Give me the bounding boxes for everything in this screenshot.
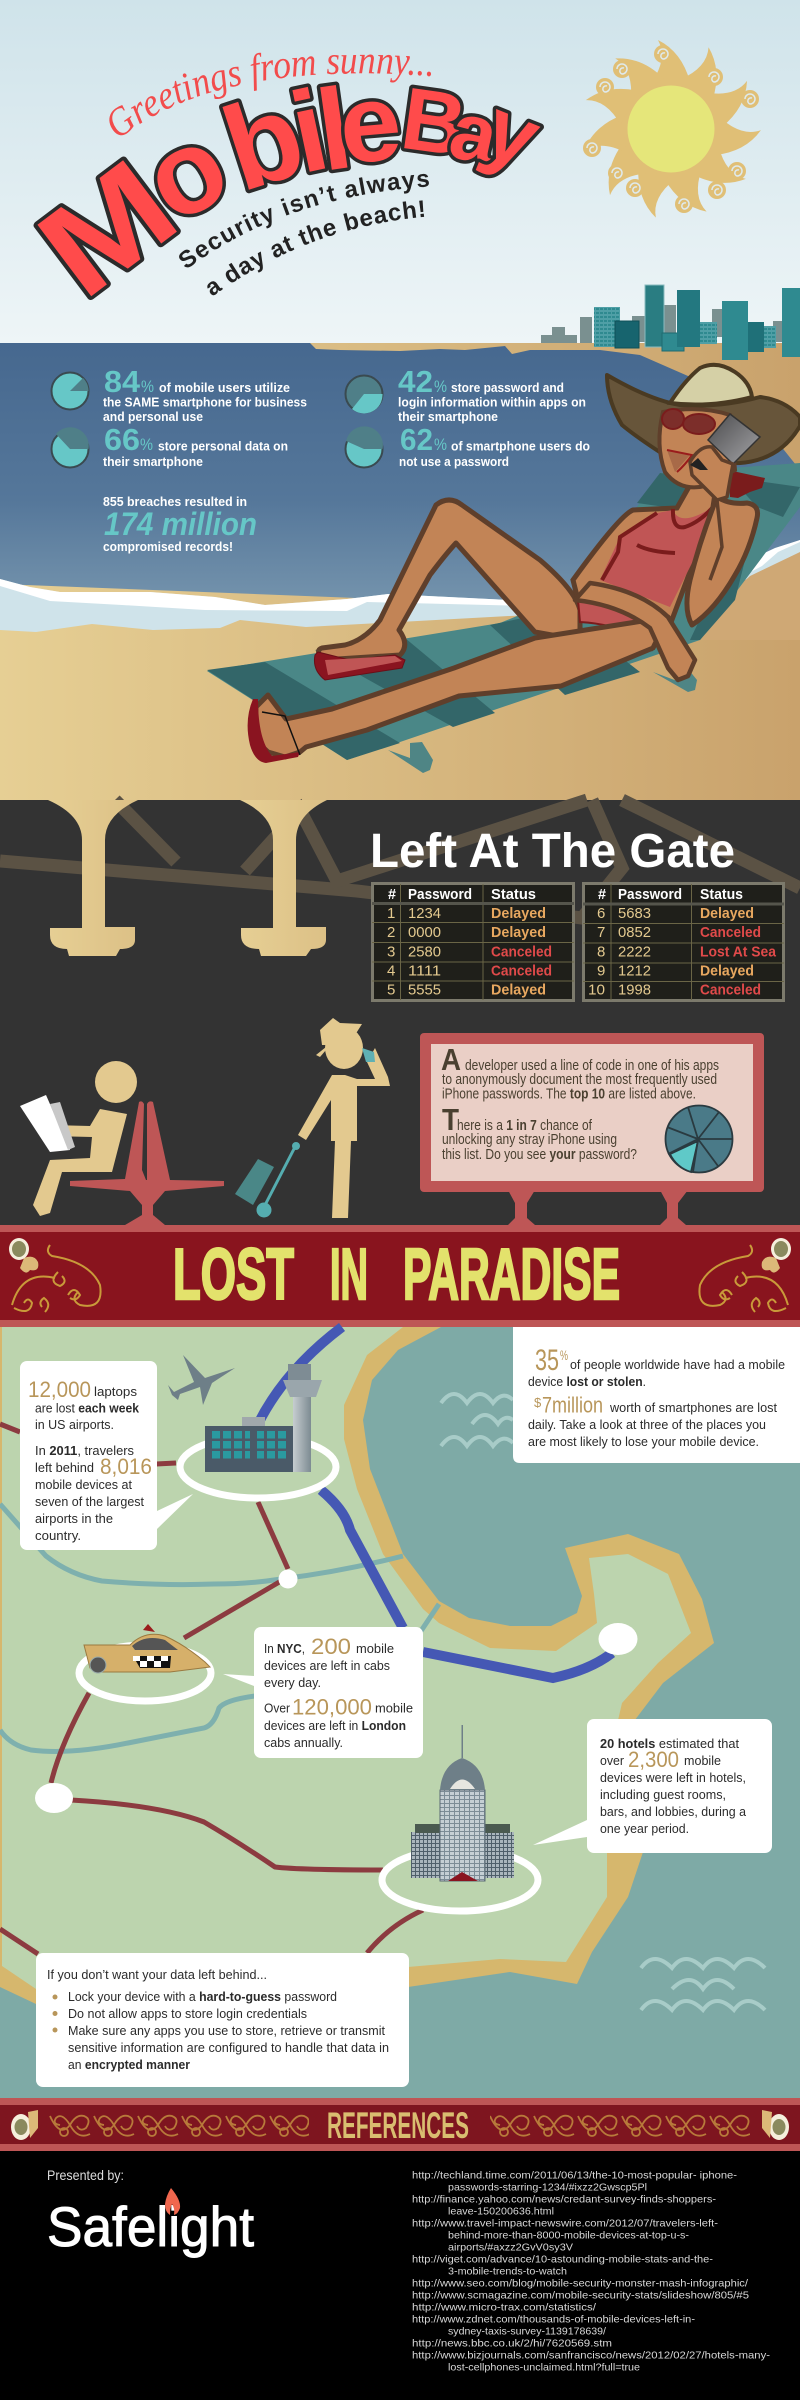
callout: taxi stats: devices are left in cabs	[264, 1658, 390, 1673]
references list: http://www.zdnet.com/thousands-of-mobile-devices-left-in-	[412, 2314, 696, 2326]
ornament left	[9, 1238, 101, 1312]
callout: airport stats: mobile devices at	[35, 1477, 132, 1492]
location: taxi	[79, 1624, 211, 1701]
table: passwords 6 to 10: 7	[597, 924, 605, 941]
ornament right	[699, 1238, 791, 1312]
table: passwords 1 to 5: 3	[387, 944, 395, 960]
stat: 62 percent: of smartphone users do	[451, 440, 590, 454]
pie: 66%	[52, 427, 89, 468]
stat: 66 percent: store personal data on	[158, 440, 288, 454]
table: passwords 1 to 5	[372, 884, 574, 1000]
callout: airport stats: in US airports.	[35, 1417, 114, 1432]
logo: presented by Safelight: Presented by:	[47, 2167, 124, 2183]
suitcase	[235, 1159, 274, 1205]
callout: airport stats: In 2011, travelers	[35, 1443, 134, 1458]
greeting script: Greetings from sunny...	[109, 52, 431, 136]
sea	[0, 343, 800, 625]
pie: 84%	[52, 372, 88, 410]
stat: 84 percent: of mobile users utilize	[159, 381, 290, 395]
references list: behind-more-than-8000-mobile-devices-at-top-u-s-	[448, 2230, 690, 2242]
table: passwords 1 to 5: 2580	[408, 944, 441, 960]
billboard: unlocking any stray iPhone using	[442, 1132, 617, 1148]
figure: seated reader	[20, 1061, 224, 1225]
heading: Mobile Bay: b	[208, 67, 319, 217]
heading: Mobile Bay: o	[123, 98, 249, 248]
stat: 84 percent: 84	[104, 364, 141, 399]
table: passwords 1 to 5: 1234	[408, 905, 441, 922]
stat: breaches: compromised records!	[103, 540, 233, 554]
back sandal sole	[325, 656, 402, 675]
sky background	[0, 0, 800, 343]
map: coast band	[0, 1327, 714, 2016]
stat: 42 percent: %	[434, 377, 447, 396]
table: passwords 1 to 5: Delayed	[491, 982, 546, 998]
references list: passwords-starring-1234/#ixzz2Gwscp5Pl	[448, 2182, 647, 2194]
callout: taxi stats: every day.	[264, 1675, 321, 1690]
callout: hotel stats: devices were left in hotels,	[600, 1770, 746, 1785]
callout: hotel stats: over	[600, 1753, 625, 1768]
roof truss	[0, 800, 800, 925]
billboard: iPhone passwords. The top 10 are listed above.	[442, 1086, 696, 1102]
banner: lost in paradise: IN	[330, 1235, 368, 1315]
table: passwords 6 to 10: 8	[597, 944, 605, 960]
callout: airport stats: country.	[35, 1528, 81, 1543]
callout: airport stats: left behind	[35, 1460, 94, 1475]
references list: http://www.micro-trax.com/statistics/	[412, 2302, 596, 2314]
heading: Mobile Bay: M	[13, 132, 202, 325]
swimsuit top	[600, 507, 713, 607]
pie: 62%	[346, 426, 383, 468]
table: passwords 1 to 5: Delayed	[491, 905, 546, 922]
pie: 42%	[346, 376, 383, 413]
figure: traveller on phone	[235, 1018, 390, 1218]
footer background	[0, 2151, 800, 2400]
references list: airports/#axzz2GvV0sy3V	[448, 2242, 573, 2254]
raised arm	[687, 497, 758, 625]
stat: 84 percent	[52, 364, 307, 424]
icon: flame	[165, 2188, 180, 2215]
hat brim	[607, 375, 800, 465]
callout: tips: an encrypted manner	[68, 2057, 190, 2072]
references list: http://techland.time.com/2011/06/13/the-10-most-popular- iphone-	[412, 2170, 738, 2182]
callout: intro stats: worth of smartphones are lost	[609, 1400, 777, 1415]
stat: 42 percent: login information within apps on	[398, 396, 586, 410]
sandal strap	[262, 712, 300, 755]
callout: intro stats	[513, 1327, 800, 1463]
beach towel	[207, 463, 800, 760]
callout: hotel stats: one year period.	[600, 1821, 689, 1836]
callout: hotel stats: bars, and lobbies, during a	[600, 1804, 747, 1819]
back leg	[318, 500, 580, 660]
table: passwords 6 to 10: Delayed	[700, 905, 754, 922]
sunglasses	[662, 409, 715, 434]
callout: hotel stats: mobile	[684, 1753, 721, 1768]
table: passwords 6 to 10: Canceled	[700, 924, 761, 941]
callout: intro stats: 7million	[542, 1392, 603, 1418]
title block	[13, 52, 553, 325]
callout: intro stats: daily. Take a look at three of the places you	[528, 1417, 766, 1432]
callout: intro stats: device lost or stolen.	[528, 1374, 646, 1389]
callout: tips: If you don’t want your data left behind...	[47, 1967, 267, 1982]
references list: http://www.seo.com/blog/mobile-security-monster-mash-infographic/	[412, 2278, 748, 2290]
callout: hotel stats: 20 hotels estimated that	[600, 1736, 739, 1751]
table: passwords 1 to 5: 1111	[408, 962, 441, 980]
stat: 66 percent: their smartphone	[103, 455, 203, 469]
tagline: Security isn’t always	[179, 174, 429, 268]
table: passwords 1 to 5: Canceled	[491, 944, 552, 960]
stat: 42 percent	[346, 364, 586, 424]
stat: 62 percent: not use a password	[399, 455, 509, 469]
heading: Mobile Bay: i	[280, 66, 338, 198]
billboard: A	[441, 1042, 461, 1077]
map: teal roads	[0, 1504, 439, 1751]
map: nodes	[35, 1570, 638, 1813]
callout: taxi stats: In NYC,	[264, 1641, 305, 1656]
hat crown	[670, 365, 752, 405]
section: left at the gate	[0, 800, 800, 1225]
table: passwords 1 to 5: Status	[491, 886, 536, 903]
table: passwords 6 to 10: 9	[597, 962, 605, 980]
stat: 66 percent: 66	[104, 422, 140, 457]
hand	[690, 447, 733, 500]
references list: http://www.bizjournals.com/sanfrancisco/news/2012/02/27/hotels-many-	[412, 2350, 771, 2362]
billboard: developer used a line of code in one of his apps	[465, 1058, 719, 1074]
icon: airplane	[168, 1355, 235, 1405]
table: passwords 1 to 5: Delayed	[491, 924, 546, 941]
billboard: T	[442, 1102, 459, 1137]
heading: Mobile Bay: B	[396, 68, 472, 175]
front sandal	[248, 699, 300, 763]
table: passwords 1 to 5: 5	[387, 982, 395, 998]
callout: taxi stats	[223, 1627, 423, 1758]
billboard: this list. Do you see your password?	[442, 1147, 637, 1163]
right foam	[745, 540, 800, 580]
table: passwords 6 to 10: Password	[618, 886, 682, 903]
table: passwords 6 to 10: 5683	[618, 905, 651, 922]
billboard: here is a 1 in 7 chance of	[457, 1118, 593, 1134]
callout: taxi stats: Over	[264, 1700, 291, 1716]
table: passwords 6 to 10: 2222	[618, 944, 651, 960]
back sandal	[314, 652, 405, 680]
table: passwords 6 to 10: 1212	[618, 962, 651, 980]
sand background	[0, 343, 800, 800]
stat: breaches: 855 breaches resulted in	[103, 495, 247, 509]
callout: hotel stats: 2,300	[628, 1747, 679, 1772]
callout: hotel stats	[533, 1719, 772, 1853]
pillar two	[240, 800, 327, 956]
phone	[362, 1048, 375, 1062]
fingers shade	[690, 458, 708, 470]
stat: 66 percent: %	[140, 435, 153, 454]
references list: http://news.bbc.co.uk/2/hi/7620569.stm	[412, 2338, 612, 2350]
forearm line	[710, 500, 722, 580]
callout: airport stats: laptops	[94, 1384, 137, 1399]
pillar one	[48, 800, 138, 956]
stat: 84 percent: and personal use	[103, 410, 203, 424]
swimsuit trim	[602, 507, 713, 580]
callout: intro stats: %	[560, 1347, 568, 1363]
torso	[573, 480, 717, 625]
heading: Mobile Bay: a	[442, 84, 507, 183]
map: waves	[441, 1394, 765, 2010]
references list: http://www.scmagazine.com/mobile-security-stats/slideshow/805/#5	[412, 2290, 749, 2302]
stat: 62 percent: 62	[400, 422, 433, 457]
mouth	[667, 450, 690, 472]
front leg	[255, 617, 668, 757]
stat: 84 percent: the SAME smartphone for business	[103, 396, 307, 410]
location: airport	[180, 1364, 336, 1498]
stat: 42 percent: store password and	[451, 381, 564, 395]
icon: smartphone	[708, 414, 760, 464]
references list: sydney-taxis-survey-1139178639/	[448, 2326, 606, 2338]
callout: taxi stats: devices are left in London	[264, 1718, 406, 1733]
references list: http://www.travel-impact-newswire.com/2012/07/travelers-left-	[412, 2218, 719, 2230]
stat: breaches: 174 million	[104, 506, 257, 542]
references list: lost-cellphones-unclaimed.html?full=true	[448, 2362, 640, 2374]
references list: leave-150200636.html	[448, 2206, 554, 2218]
table: passwords 6 to 10: 1998	[618, 982, 651, 998]
stat: breaches	[103, 495, 257, 554]
map: land	[2, 1327, 691, 2011]
callout: airport stats: are lost each week	[35, 1400, 140, 1416]
arm on hip	[575, 583, 695, 680]
table: passwords 6 to 10: Status	[700, 886, 743, 903]
callout: airport stats: seven of the largest	[35, 1494, 144, 1509]
callout: airport stats: airports in the	[35, 1511, 113, 1526]
location: hotel	[382, 1725, 538, 1911]
map: sea	[0, 1327, 800, 2098]
icon: sun	[581, 40, 762, 220]
table: passwords 1 to 5: #	[388, 886, 397, 903]
stat: 62 percent: %	[434, 435, 447, 454]
callout: taxi stats: cabs annually.	[264, 1735, 343, 1750]
callout: tips: sensitive information are configured to handle that data in	[68, 2040, 389, 2055]
lips	[667, 450, 692, 472]
banner: lost in paradise	[0, 1225, 800, 1327]
banner: references: REFERENCES	[327, 2105, 469, 2146]
callout: hotel stats: including guest rooms,	[600, 1787, 726, 1802]
stat: 42 percent: their smartphone	[398, 410, 498, 424]
map: red roads	[0, 1424, 423, 1954]
table: passwords 6 to 10: #	[598, 886, 607, 903]
stat: 66 percent	[52, 422, 288, 469]
table: passwords 1 to 5: 5555	[408, 982, 441, 998]
callout: airport stats: 8,016	[100, 1454, 152, 1479]
hair	[713, 405, 765, 498]
billboard: to anonymously document the most frequently used	[442, 1072, 717, 1088]
stat: 42 percent: 42	[398, 364, 433, 399]
newspaper	[20, 1095, 70, 1152]
pie: 1 in 7 wheel	[666, 1106, 732, 1172]
callout: intro stats: $	[534, 1395, 542, 1410]
table: passwords 1 to 5: 1	[387, 905, 395, 922]
woman on towel	[248, 365, 800, 763]
callout: tips: Lock your device with a hard-to-guess password	[68, 1989, 337, 2004]
table: passwords 6 to 10: 6	[597, 905, 605, 922]
table: passwords 1 to 5: Password	[408, 886, 472, 903]
callout: intro stats: of people worldwide have had a mobile	[570, 1357, 785, 1372]
sand lower right	[700, 552, 800, 640]
callout: tips: Make sure any apps you use to store, retrieve or transmit	[68, 2023, 385, 2038]
table: passwords 1 to 5: Canceled	[491, 962, 552, 980]
towel stand legs	[388, 664, 697, 773]
callout: tips	[36, 1953, 409, 2087]
callout: taxi stats: mobile	[356, 1641, 394, 1656]
callout: intro stats: 35	[535, 1344, 559, 1377]
face	[659, 409, 735, 487]
table: passwords 6 to 10: Delayed	[700, 962, 754, 980]
table: passwords 6 to 10: 0852	[618, 924, 651, 941]
banner: lost in paradise: PARADISE	[403, 1235, 620, 1315]
table: passwords 6 to 10: 10	[588, 982, 605, 998]
references list: 3-mobile-trends-to-watch	[448, 2266, 567, 2278]
references list: http://finance.yahoo.com/news/credant-survey-finds-shoppers-	[412, 2194, 717, 2206]
callout: taxi stats: mobile	[375, 1700, 413, 1716]
table: passwords 1 to 5: 2	[387, 924, 395, 941]
white surf	[0, 579, 570, 611]
references list: http://viget.com/advance/10-astounding-mobile-stats-and-the-	[412, 2254, 714, 2266]
table: passwords 6 to 10	[583, 884, 784, 1000]
callout: intro stats: are most likely to lose your mobile device.	[528, 1434, 759, 1449]
airport seat	[70, 1101, 224, 1225]
heading: Mobile Bay: y	[471, 78, 553, 188]
callout: taxi stats: 200	[311, 1634, 351, 1659]
callout: tips: Do not allow apps to store login credentials	[68, 2006, 307, 2021]
table: passwords 1 to 5: 0000	[408, 924, 441, 941]
table: passwords 1 to 5: 4	[387, 962, 395, 980]
stat: 62 percent	[346, 422, 590, 469]
callout: airport stats	[20, 1361, 193, 1550]
heading: Mobile Bay: l	[310, 64, 359, 196]
heading: Mobile Bay	[13, 60, 553, 325]
billboard	[420, 1033, 764, 1225]
white surf right	[745, 540, 800, 575]
callout: airport stats: 12,000	[28, 1377, 91, 1402]
callout: taxi stats: 120,000	[292, 1694, 372, 1720]
city skyline	[541, 285, 800, 360]
logo: presented by Safelight: Safelight	[47, 2195, 254, 2258]
table: passwords 6 to 10: Canceled	[700, 982, 761, 998]
heading: Mobile Bay: e	[334, 60, 406, 187]
banner: lost in paradise: LOST	[173, 1235, 294, 1315]
shoreline foam	[0, 579, 570, 632]
bikini bottom	[578, 600, 656, 650]
logo: presented by Safelight	[47, 2167, 254, 2258]
heading: left at the gate: Left At The Gate	[370, 825, 735, 878]
tagline: a day at the beach!	[207, 200, 424, 296]
stat: 84 percent: %	[141, 377, 154, 396]
map: blue highway	[258, 1327, 612, 1678]
banner: references	[0, 2098, 800, 2151]
references list	[412, 2170, 771, 2374]
table: passwords 6 to 10: Lost At Sea	[700, 944, 777, 960]
